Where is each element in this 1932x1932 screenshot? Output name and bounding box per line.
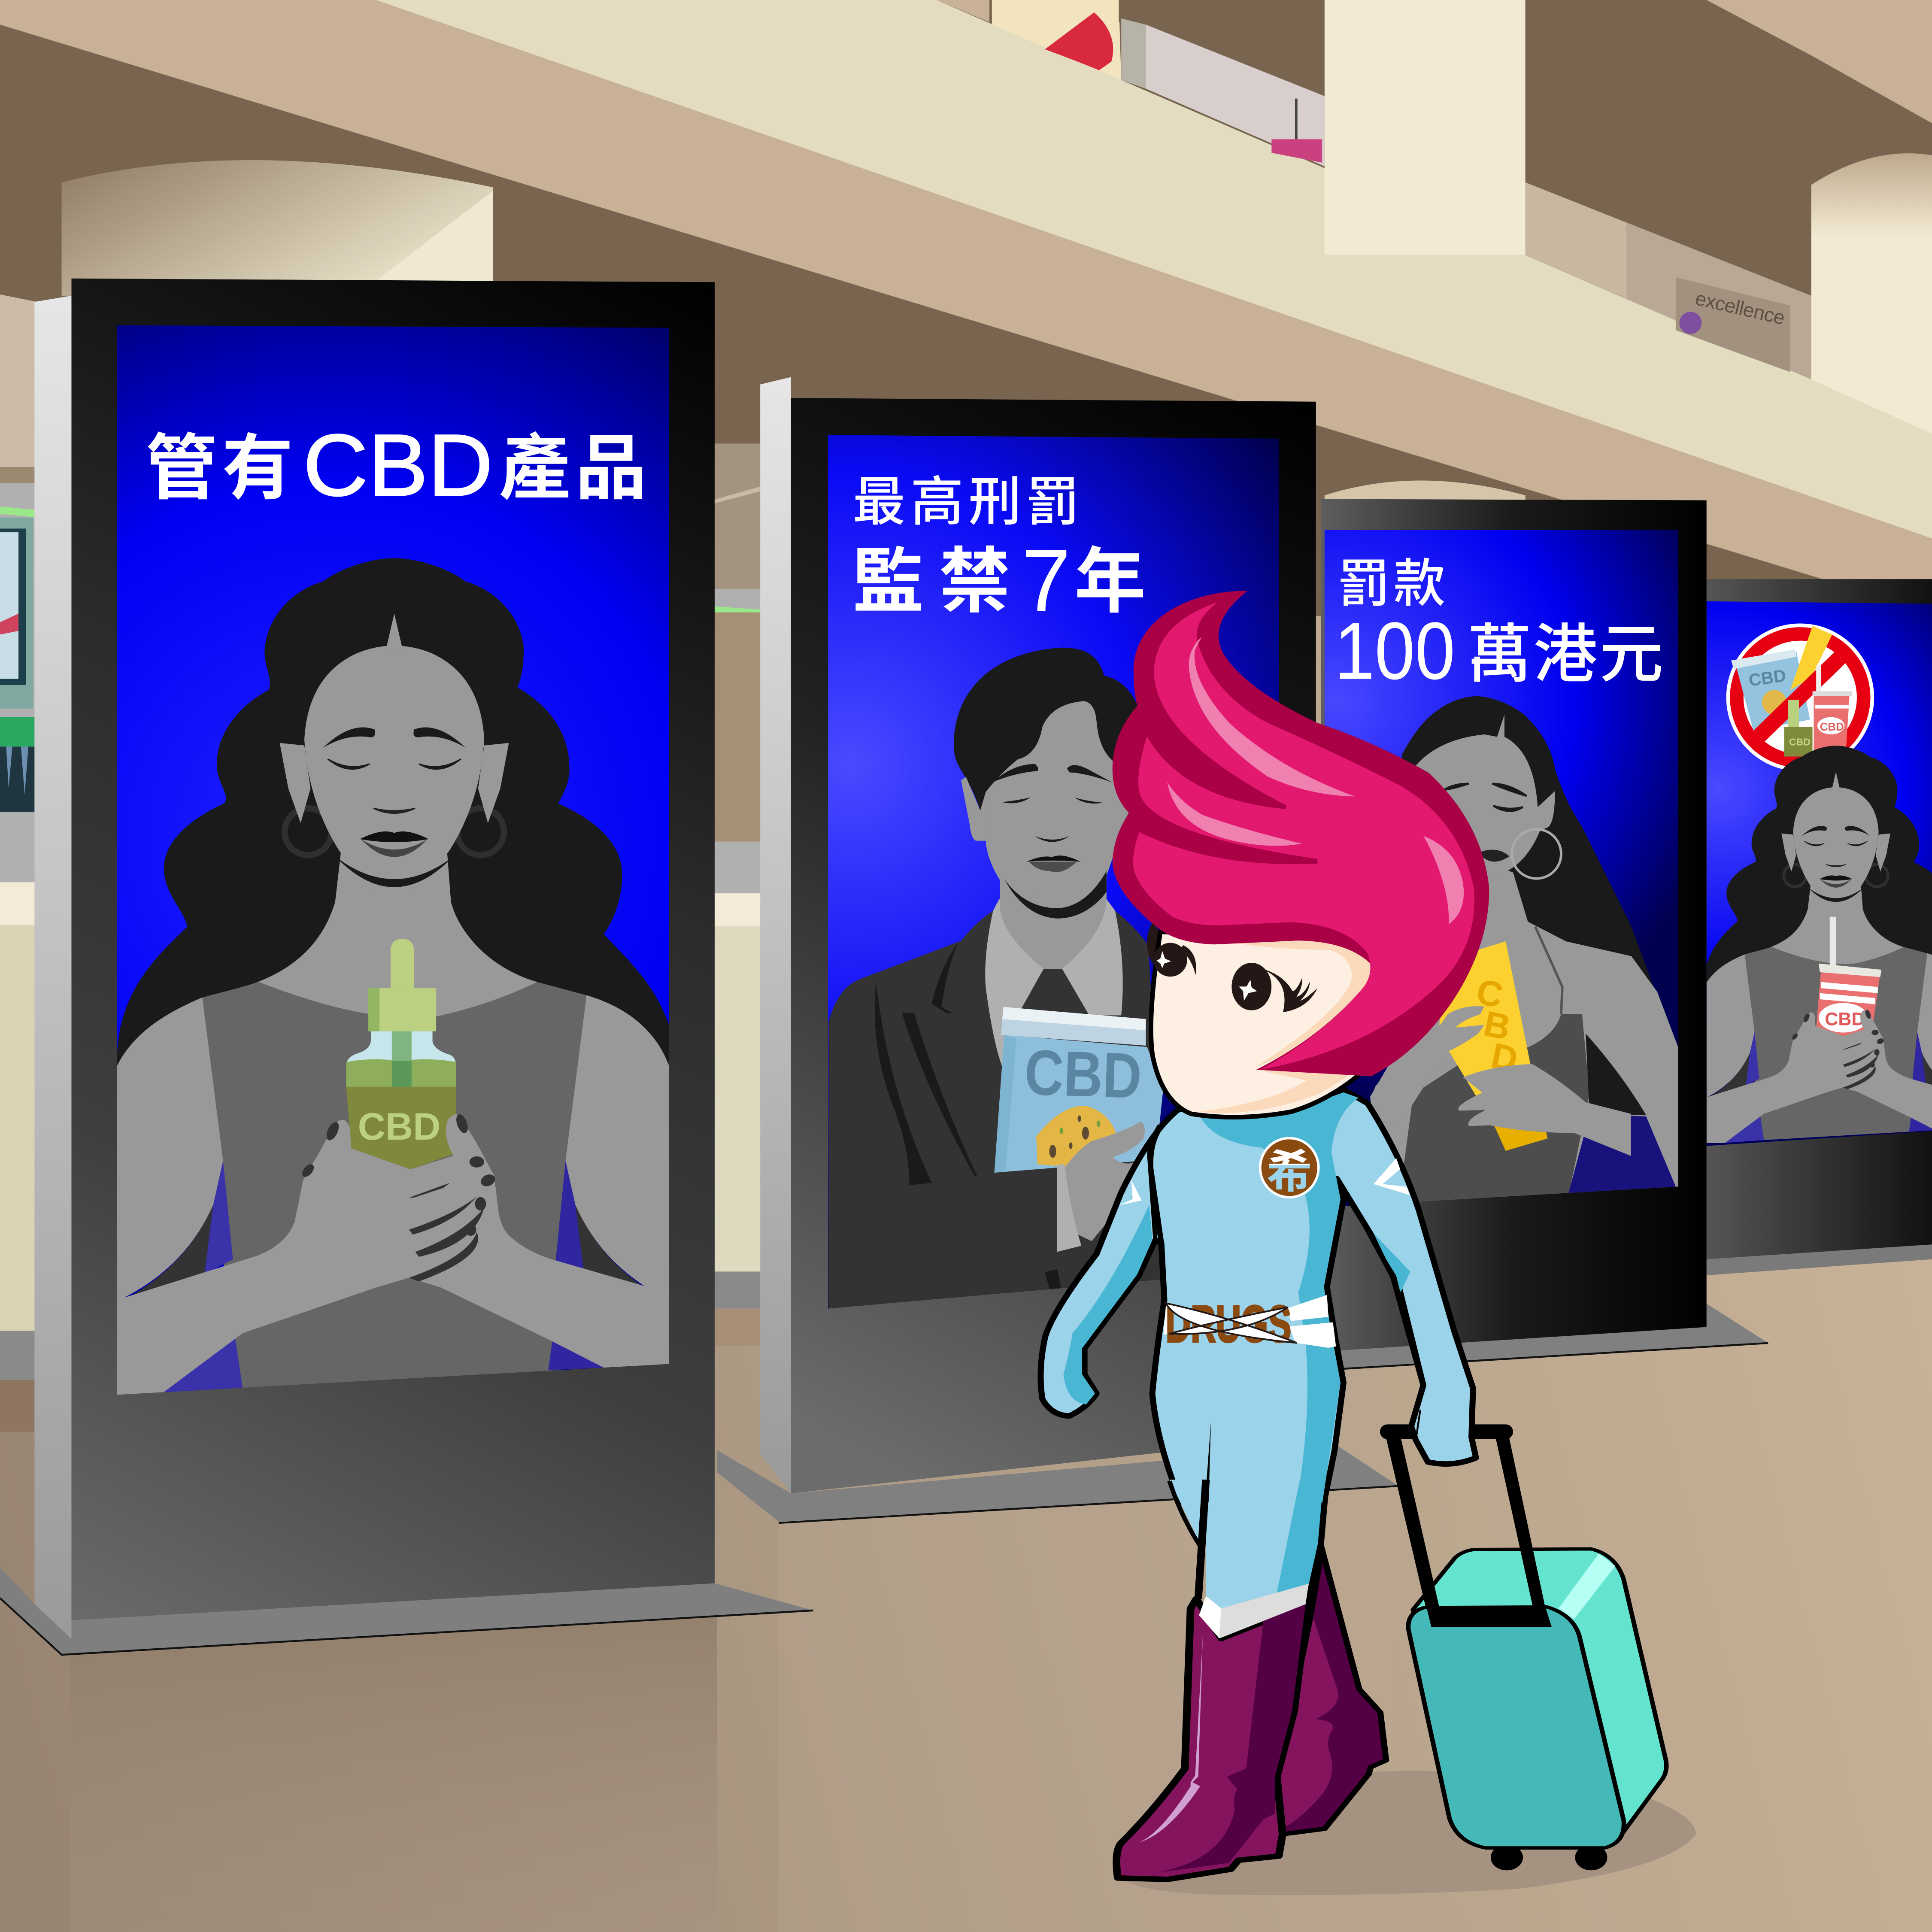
character: hero with suitcase [1040, 591, 1666, 1879]
CBD cookie bag [995, 1007, 1163, 1173]
text: possession: 管有 [146, 428, 293, 508]
belt [1163, 1295, 1336, 1348]
ceiling beam [0, 0, 1932, 613]
luggage shadow [1125, 1771, 1696, 1895]
CBD tube: D [1488, 1035, 1521, 1080]
boots [1116, 1545, 1386, 1879]
eyes [1153, 943, 1317, 1012]
CBD tube: B [1480, 1003, 1514, 1048]
CBD oil bottle: CBD [358, 1105, 440, 1148]
man with cookie bag [828, 648, 1166, 1318]
panel 3: fine kiosk [1321, 499, 1768, 1370]
excellence sign [1676, 277, 1790, 372]
text: prison [852, 472, 1146, 630]
columns [62, 153, 1932, 505]
text: prison: 7 [1022, 531, 1071, 630]
CBD oil bottle [346, 939, 456, 1169]
text: fine: 100 [1335, 606, 1455, 697]
suit shading [1064, 1092, 1423, 1502]
hair [1113, 591, 1489, 1076]
text: prison: 最高刑罰 [852, 472, 1080, 531]
CBD tube [1439, 941, 1547, 1151]
drink cup: CBD [1825, 1009, 1865, 1029]
text: prison: 監禁 [852, 542, 1010, 622]
woman with oil [113, 558, 671, 1395]
panel 2: prison kiosk [717, 377, 1398, 1523]
prohibition sign: CBD [1747, 666, 1787, 690]
text: possession: CBD [303, 417, 493, 514]
text: possession [146, 417, 647, 514]
shop sign: red shape [1045, 12, 1113, 70]
belt cross [1166, 1303, 1297, 1343]
shop sign: pink [1271, 99, 1322, 163]
suit figure [1040, 1090, 1476, 1502]
prohibition sign: CBD [1820, 721, 1844, 733]
text: fine [1335, 555, 1663, 697]
text: possession: 產品 [499, 428, 647, 508]
suitcase handle [1380, 1424, 1545, 1607]
head [1113, 591, 1489, 1117]
suit lower leg [1170, 1478, 1329, 1638]
belt text: DRUGS [1166, 1295, 1291, 1353]
excellence sign: excellence [1693, 287, 1787, 329]
panel 4: far right kiosk [1702, 579, 1932, 1275]
woman with tube [1367, 696, 1678, 1207]
front boot [1116, 1599, 1307, 1879]
panel 1: possession kiosk [0, 279, 813, 1655]
back boot [1277, 1545, 1386, 1834]
CBD tube: C [1473, 971, 1507, 1016]
drink cup [1816, 917, 1882, 1036]
text: fine: 罰款 [1338, 555, 1445, 613]
badge: 希 [1267, 1146, 1312, 1198]
suitcase [1408, 1549, 1666, 1870]
upper level shop windows [937, 0, 1932, 379]
badge [1260, 1138, 1319, 1198]
bag label: CBD [1023, 1036, 1143, 1112]
text: fine: 萬港元 [1468, 619, 1663, 690]
text: prison: 年 [1074, 542, 1146, 622]
prohibition sign: CBD [1789, 737, 1811, 748]
prohibition sign [1726, 623, 1874, 771]
woman with drink [1702, 746, 1932, 1143]
